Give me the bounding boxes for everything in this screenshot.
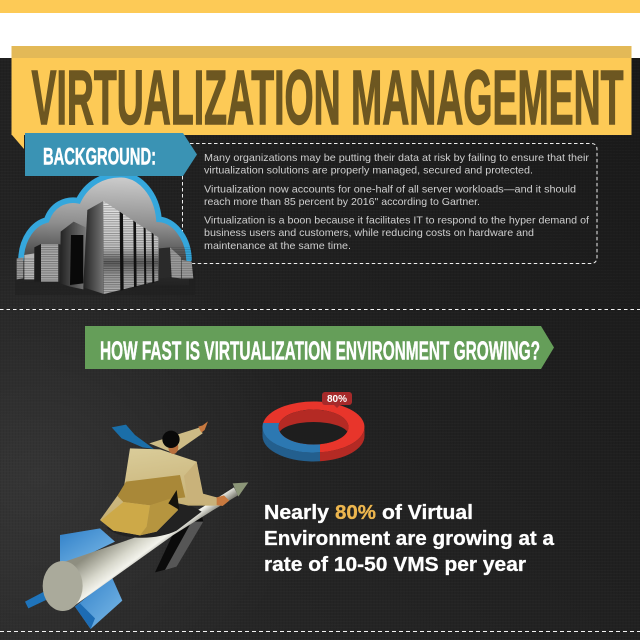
right small servers	[159, 247, 172, 278]
bottom divider	[0, 630, 640, 632]
background text block: Virtualization now accounts for one-half of all server workloads—and it should	[204, 184, 576, 196]
background heading: BACKGROUND:	[43, 144, 156, 170]
left small servers	[17, 244, 62, 282]
cloud fill	[21, 175, 189, 285]
donut top red	[263, 402, 364, 452]
rocket tip	[233, 482, 248, 497]
jacket lower right	[140, 499, 178, 535]
middle dark tower	[60, 222, 86, 289]
donut side wall blue	[262, 427, 320, 462]
upper fin	[60, 528, 115, 563]
background text block: business users and customers, while reducing costs on hardware and	[204, 227, 534, 239]
white band	[0, 13, 640, 48]
jacket lower patch	[101, 502, 150, 535]
donut hole	[278, 410, 348, 444]
donut side wall red	[320, 427, 365, 461]
green heading arrow	[85, 326, 554, 369]
icon: cloud with servers	[15, 175, 195, 295]
ground	[15, 270, 195, 295]
background text block: Many organizations may be putting their data at risk by failing to ensure that their	[204, 152, 590, 164]
rocket body	[63, 487, 238, 610]
section divider	[0, 308, 640, 310]
background text block: maintenance at the same time.	[204, 240, 351, 252]
donut top blue	[262, 423, 320, 453]
raised arm	[149, 427, 203, 453]
trousers on rocket	[106, 503, 202, 538]
hand on rocket	[217, 495, 229, 506]
cloud outline	[21, 175, 189, 259]
lower fin	[75, 577, 122, 629]
rocket end cap	[43, 561, 83, 611]
illustration: businessman riding rocket	[25, 421, 248, 629]
necktie	[112, 425, 154, 449]
head	[162, 431, 180, 454]
rack gaps	[120, 212, 124, 291]
jacket	[100, 448, 218, 535]
statistic text: Environment are growing at a	[264, 528, 555, 550]
background label arrow	[25, 133, 197, 176]
background text block: Virtualization is a boon because it facilitates IT to respond to the hyper demand of	[204, 214, 589, 226]
top yellow band	[0, 0, 640, 13]
percentage tag: 80%	[327, 394, 347, 405]
statistic text	[264, 502, 555, 576]
background text block	[204, 152, 590, 252]
jacket fold	[168, 490, 179, 510]
statistic text: 80%	[335, 502, 376, 524]
jacket sleeve	[184, 462, 217, 506]
statistic text: of Virtual	[382, 502, 473, 524]
jacket shadow band	[117, 475, 185, 505]
statistic text: Nearly	[264, 502, 330, 524]
title banner	[12, 46, 632, 149]
background text block: reach more than 85 percent by 2016" according to Gartner.	[204, 196, 480, 208]
dashed text box	[182, 144, 597, 264]
rear leg	[155, 507, 203, 572]
main tower side face	[103, 201, 158, 294]
main tower dark face	[83, 201, 104, 294]
statistic text: rate of 10-50 VMS per year	[264, 554, 526, 576]
rocket nozzle	[25, 592, 46, 608]
background text block: virtualization solutions are properly managed, secured and protected.	[204, 164, 533, 176]
donut chart	[262, 392, 365, 462]
